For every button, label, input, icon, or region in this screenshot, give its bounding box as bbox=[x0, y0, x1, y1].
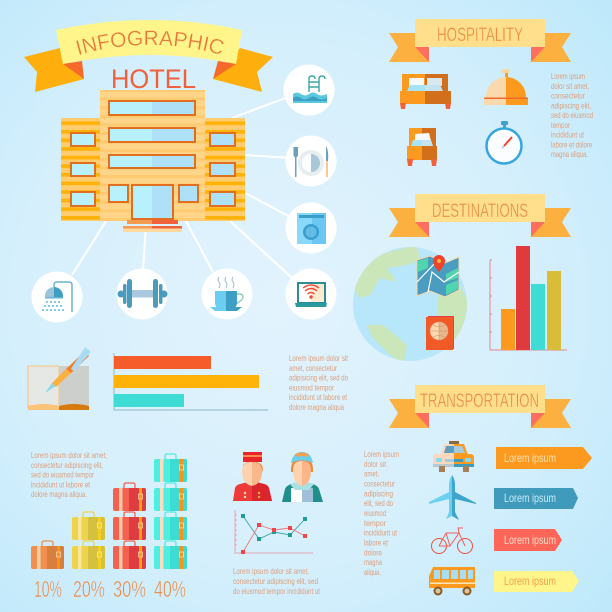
arrow label: coral: Lorem ipsum bbox=[504, 533, 556, 547]
icon: plate and cutlery bbox=[286, 136, 336, 186]
title: infographic: INFOGRAPHIC bbox=[76, 30, 224, 55]
arrow label: coral bbox=[494, 529, 562, 551]
banner: destinations bbox=[389, 194, 571, 237]
icon: housekeeper bbox=[282, 452, 323, 502]
text: narrow column description: adipiscing bbox=[364, 488, 393, 498]
percentage labels: 30% bbox=[113, 576, 146, 602]
text: hospitality description bbox=[551, 71, 593, 159]
bar chart: destinations bbox=[490, 246, 567, 350]
banner: destinations: DESTINATIONS bbox=[432, 201, 528, 222]
text: luggage description: incididunt ut labore et bbox=[31, 479, 90, 489]
text: line chart description bbox=[233, 566, 320, 596]
icon: dumbbell bbox=[116, 268, 168, 320]
text: narrow column description: dolor sit bbox=[364, 459, 386, 469]
pictogram chart: luggage bbox=[31, 454, 187, 569]
icon: book and pen bbox=[28, 347, 91, 410]
icon: single bed bbox=[407, 128, 437, 166]
icon: bellboy bbox=[233, 452, 272, 501]
connector lines bbox=[72, 97, 292, 278]
line chart bbox=[235, 510, 313, 554]
text: bar chart description: eiusmod tempor bbox=[289, 382, 334, 392]
text: bar chart description: incididunt ut labore et bbox=[289, 392, 347, 402]
text: bar chart description bbox=[289, 353, 348, 412]
text: narrow column description: consectetur bbox=[364, 478, 395, 488]
text: line chart description: do eiusmod tempor incididunt ut bbox=[233, 586, 320, 596]
text: luggage description: consectetur adipiscing elit, bbox=[31, 460, 103, 470]
hotel building bbox=[61, 90, 245, 232]
bar chart: horizontal bbox=[114, 353, 268, 410]
banner: hospitality: HOSPITALITY bbox=[437, 25, 523, 46]
banner: transportation bbox=[389, 385, 571, 428]
globe bbox=[353, 245, 470, 365]
text: hospitality description: incididunt ut bbox=[551, 130, 584, 140]
text: bar chart description: amet, consectetur bbox=[289, 363, 337, 373]
text: bar chart description: dolore magna aliqua bbox=[289, 402, 344, 412]
arrow label: orange: Lorem ipsum bbox=[504, 451, 556, 465]
text: narrow column description: tempor bbox=[364, 518, 386, 528]
text: narrow column description: magna bbox=[364, 557, 382, 567]
title ribbon bbox=[24, 20, 273, 92]
text: luggage description bbox=[31, 450, 107, 499]
icon: coffee cup bbox=[202, 268, 252, 320]
text: narrow column description: elit, sed do bbox=[364, 498, 393, 508]
percentage labels: 20% bbox=[73, 576, 105, 602]
arrow label: blue bbox=[494, 488, 578, 509]
banner: hospitality bbox=[389, 19, 571, 62]
text: narrow column description: eiusmod bbox=[364, 508, 386, 518]
text: hospitality description: magna aliqua. bbox=[551, 149, 588, 159]
text: luggage description: dolore magna aliqua. bbox=[31, 489, 87, 499]
text: narrow column description: dolore bbox=[364, 547, 382, 557]
text: narrow column description: labore et bbox=[364, 538, 388, 548]
icon: folded map bbox=[417, 255, 459, 297]
icon: bicycle bbox=[432, 528, 472, 554]
icon: service bell bbox=[484, 69, 528, 105]
text: bar chart description: adipisicing elit, sed do bbox=[289, 373, 348, 383]
text: narrow column description: Lorem ipsum bbox=[364, 449, 399, 459]
arrow label: blue: Lorem ipsum bbox=[504, 491, 556, 505]
banner: transportation: TRANSPORTATION bbox=[420, 391, 539, 412]
icon: bus bbox=[429, 567, 475, 596]
text: narrow column description: amet, bbox=[364, 469, 379, 479]
icon: stopwatch bbox=[486, 121, 522, 164]
text: hospitality description: labore et dolore bbox=[551, 139, 592, 149]
arrow label: yellow: Lorem ipsum bbox=[504, 574, 556, 588]
icon: taxi bbox=[433, 441, 474, 472]
arrow label: orange bbox=[496, 447, 592, 469]
text: hospitality description: sed do eiusmod bbox=[551, 110, 593, 120]
percentage labels: 40% bbox=[154, 576, 186, 602]
text: narrow column description: incididunt ut bbox=[364, 528, 397, 538]
text: hospitality description: consectetur bbox=[551, 90, 585, 100]
text: hospitality description: adipiscing elit, bbox=[551, 100, 591, 110]
text: narrow column description: aliqua. bbox=[364, 567, 381, 577]
icon: swimming pool bbox=[284, 64, 334, 116]
text: luggage description: sed do eiusmod tempor bbox=[31, 470, 94, 480]
text: hospitality description: Lorem ipsum bbox=[551, 71, 585, 81]
arrow label: yellow bbox=[494, 571, 579, 592]
percentage labels bbox=[34, 576, 186, 602]
text: hospitality description: dolor sit amet, bbox=[551, 81, 589, 91]
percentage labels: 10% bbox=[34, 576, 62, 602]
icon: shower bbox=[32, 272, 82, 322]
heading: hotel: HOTEL bbox=[111, 64, 196, 94]
text: narrow column description bbox=[364, 449, 399, 577]
text: hospitality description: tempor bbox=[551, 120, 570, 130]
icon: washing machine bbox=[286, 202, 336, 254]
text: line chart description: consectetur adipiscing elit, sed bbox=[233, 576, 318, 586]
text: luggage description: Lorem ipsum dolor sit amet, bbox=[31, 450, 107, 460]
icon: double bed bbox=[400, 74, 451, 109]
icon: airplane bbox=[429, 475, 476, 520]
text: bar chart description: Lorem ipsum dolor sit bbox=[289, 353, 348, 363]
text: line chart description: Lorem ipsum dolor sit amet, bbox=[233, 566, 309, 576]
icon: laptop with wifi bbox=[286, 268, 336, 320]
icon: passport bbox=[426, 316, 454, 350]
